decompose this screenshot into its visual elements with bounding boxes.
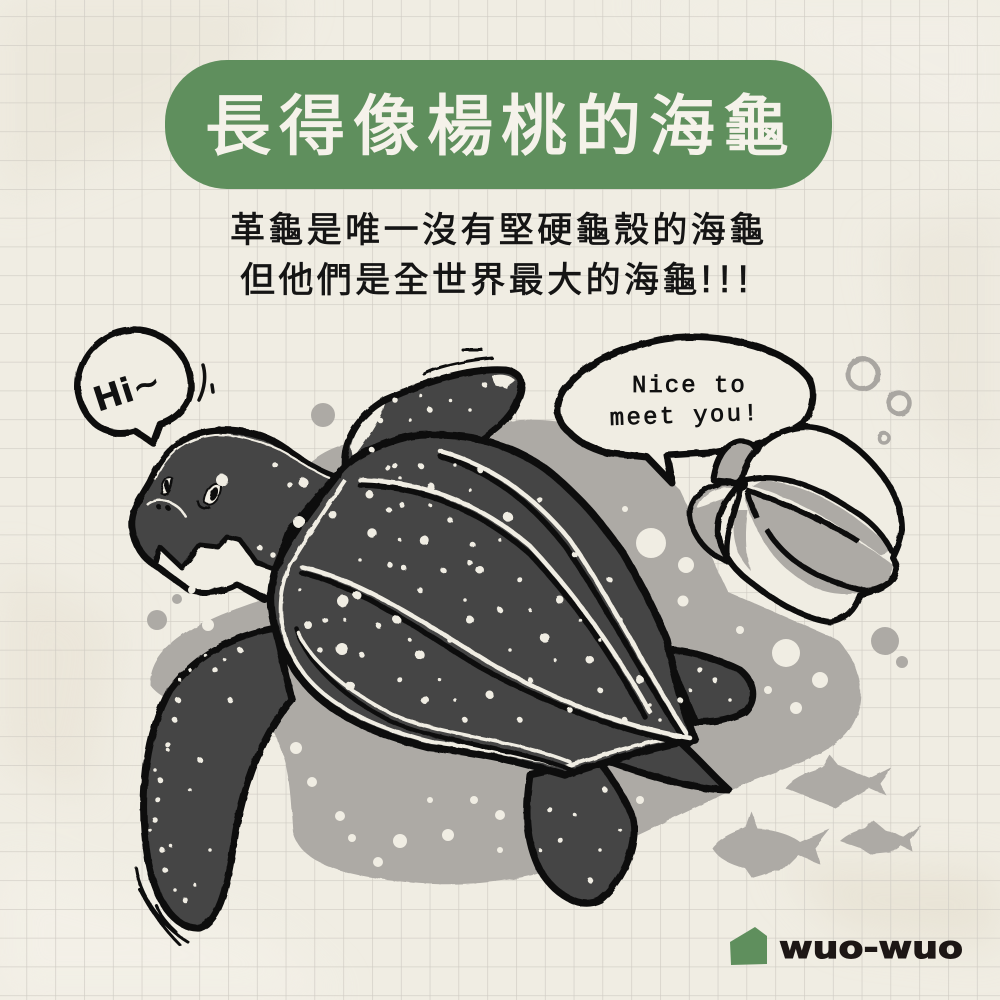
lower lobe shadow <box>734 510 750 570</box>
bubble text: Nice to meet you: Nice to <box>632 373 747 400</box>
back lobe <box>713 441 758 483</box>
head rim highlight <box>155 435 332 480</box>
title banner <box>165 60 832 189</box>
bubble text: Hi: Hi~ <box>88 361 166 421</box>
fish silhouettes <box>712 755 921 878</box>
top flipper <box>345 370 522 468</box>
logo text: wuo-wuo <box>779 931 963 966</box>
speech bubble: Hi <box>78 330 213 443</box>
left lobe <box>690 483 738 562</box>
subtitle: 革龜是唯一沒有堅硬龜殼的海龜 <box>230 211 768 250</box>
top flipper highlight <box>351 375 515 458</box>
motion lines: top flipper <box>424 350 492 374</box>
main lobes <box>718 427 902 622</box>
segment lines <box>727 478 893 590</box>
right rear flipper <box>665 650 753 722</box>
bubble text: Nice to meet you: meet you! <box>609 401 761 433</box>
star fruit <box>690 427 902 622</box>
icon: house <box>730 927 767 965</box>
eyes and nostrils <box>147 477 221 517</box>
bottom rear flipper <box>527 760 634 903</box>
shell and skin spots <box>150 385 730 900</box>
inner shading <box>745 492 893 594</box>
head and neck <box>132 430 335 600</box>
shell rim highlight <box>281 480 688 767</box>
left lobe highlight <box>697 488 732 508</box>
shell ridges <box>296 451 690 771</box>
bubble text: Nice to meet you <box>609 373 761 433</box>
tail <box>600 742 729 790</box>
stem <box>734 477 748 491</box>
title text: 長得像楊桃的海龜 <box>205 89 797 163</box>
motion lines: Hi bubble <box>199 365 213 400</box>
front left flipper <box>144 628 292 928</box>
logo <box>730 927 963 966</box>
motion lines: left flipper <box>136 868 188 945</box>
small grey dots <box>147 403 908 668</box>
pale dots in blob <box>202 506 828 867</box>
shell <box>271 435 695 775</box>
bubbles <box>848 359 910 443</box>
speech bubble: Nice to meet you <box>558 337 813 483</box>
turtle <box>132 350 753 945</box>
subtitle <box>230 211 768 301</box>
white chin and mouth <box>155 537 277 598</box>
subtitle: 但他們是全世界最大的海龜!!! <box>240 259 756 301</box>
grey background blob <box>150 420 861 884</box>
